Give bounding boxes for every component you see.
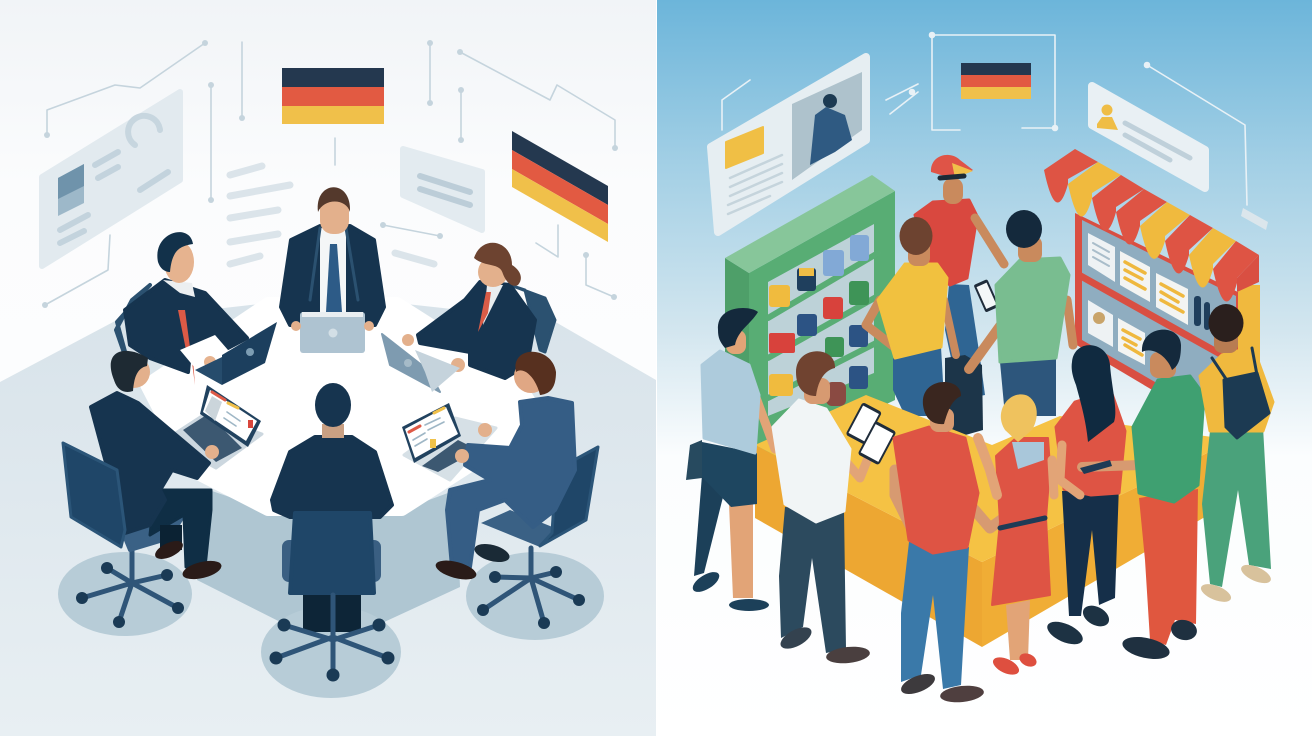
person: front-centre man seen from back — [272, 383, 392, 632]
person: vendor in red cap — [915, 155, 1004, 400]
person: top-left man — [116, 232, 247, 385]
table shadow — [197, 490, 460, 647]
person: blonde woman in red dress — [978, 394, 1054, 678]
wall text lines — [230, 166, 434, 264]
panel: market stall crowd — [657, 0, 1312, 736]
chair: left back rest — [63, 443, 125, 547]
flag: top centre — [282, 68, 384, 124]
left background — [0, 0, 656, 736]
wall decor: circuit lines — [42, 40, 618, 308]
right background — [657, 0, 1312, 736]
person: top-right woman — [402, 243, 555, 378]
flag: small top — [961, 63, 1031, 99]
person: man in green shirt — [969, 210, 1073, 416]
speech bubble card — [403, 149, 482, 230]
phones — [845, 402, 897, 465]
laptop: right screen — [402, 403, 496, 480]
wall card: dashboard — [42, 92, 180, 266]
phone: vendor — [974, 279, 999, 313]
person: man in white shirt with phones — [773, 351, 871, 665]
person: man in yellow shirt — [866, 217, 956, 416]
person: man in green tee and red trousers — [1080, 330, 1204, 663]
laptop: top-right grey — [382, 334, 460, 392]
person: woman in light-blue tee — [686, 308, 775, 611]
chair: right — [477, 447, 598, 629]
chair: front-centre — [270, 513, 394, 682]
person: man in red shirt — [894, 382, 1022, 704]
laptop: top-left dark — [195, 322, 277, 385]
laptop: top-centre — [291, 312, 374, 353]
wire connector device — [1241, 208, 1268, 230]
wall decor: top lines — [722, 32, 1247, 205]
panel: boardroom meeting — [0, 0, 656, 736]
card: poster with photo — [711, 57, 866, 232]
awning stripes — [1044, 149, 1259, 301]
counter: yellow L-shaped — [755, 395, 1234, 647]
bag: dark shopping bag — [945, 355, 983, 436]
person: left man in profile — [91, 351, 223, 583]
stall: poster wall with awning — [1044, 149, 1260, 420]
shelf products — [769, 235, 869, 406]
floor — [0, 303, 656, 736]
person: backpack wearer in yellow and green — [1199, 304, 1273, 605]
shelf: green product rack — [725, 175, 895, 470]
laptop: left screen — [165, 385, 262, 468]
card: profile card — [1092, 86, 1205, 188]
chair shadows — [58, 552, 604, 698]
person: top-centre man — [281, 187, 384, 325]
table — [146, 303, 542, 510]
person: right man in blue suit — [434, 352, 575, 583]
person: black-haired woman in red top — [1044, 345, 1125, 649]
poster cards — [1088, 233, 1210, 365]
flag: perspective right — [512, 131, 608, 242]
chair: left — [76, 518, 184, 628]
